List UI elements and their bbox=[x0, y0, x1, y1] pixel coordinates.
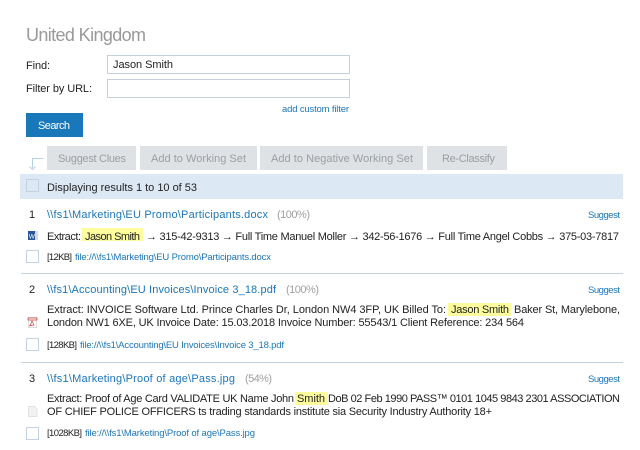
result 2 bbox=[26, 284, 620, 351]
button: add to working set bbox=[140, 146, 257, 170]
result 2 checkbox bbox=[26, 338, 38, 350]
selection arrow icon bbox=[30, 158, 44, 170]
result 1 highlight bbox=[82, 228, 143, 241]
results header bar: Displaying results 1 to 10 of 53 bbox=[47, 182, 197, 194]
result 3 extract bbox=[47, 393, 620, 418]
result 2 extract: Extract: INVOICE Software Ltd. Prince Charles Dr, London NW4 3FP, UK Billed To: bbox=[47, 304, 446, 316]
result 2 extract: Baker St, Marylebone, bbox=[514, 304, 620, 316]
search button bbox=[26, 113, 83, 137]
result 1: 1 bbox=[29, 209, 35, 221]
form: filter by URL field: Filter by URL: bbox=[26, 83, 92, 95]
title: United Kingdom bbox=[26, 25, 146, 45]
result 3: 3 bbox=[29, 373, 35, 385]
result 1 score: (100%) bbox=[277, 209, 310, 221]
result 1 bbox=[26, 209, 620, 263]
results header bar bbox=[20, 174, 623, 199]
icon: blank document bbox=[28, 406, 37, 416]
result 2 link: \\fs1\Accounting\EU Invoices\Invoice 3_18.pdf bbox=[47, 284, 277, 296]
icon: pdf document bbox=[28, 318, 37, 328]
result 1 suggest link: Suggest bbox=[588, 210, 620, 221]
result 3 bbox=[26, 373, 620, 440]
result 2: 2 bbox=[29, 284, 35, 296]
button: re-classify bbox=[427, 146, 507, 170]
button: suggest clues: Suggest Clues bbox=[58, 153, 126, 165]
result 3 checkbox bbox=[26, 428, 38, 440]
form: find field: Find: bbox=[26, 60, 50, 72]
result 3 highlight bbox=[295, 392, 328, 405]
result 1 link: \\fs1\Marketing\EU Promo\Participants.docx bbox=[47, 209, 268, 221]
result 2 score: (100%) bbox=[286, 284, 319, 296]
result 3 score: (54%) bbox=[245, 373, 272, 385]
result 3 extract: Extract: Proof of Age Card VALIDATE UK Name John bbox=[47, 393, 294, 405]
search button: Search bbox=[38, 120, 70, 132]
result 1 file info: [12KB] bbox=[47, 252, 72, 263]
result 1 extract: → 315-42-9313 → Full Time Manuel Moller → 342-56-1676 → Full Time Angel Cobbs → 375-03-7817 bbox=[146, 231, 619, 243]
result 3 file info: [1028KB] bbox=[47, 428, 82, 439]
button: add to negative working set bbox=[260, 146, 423, 170]
form: find field: Jason Smith bbox=[113, 59, 173, 71]
result 2 extract bbox=[47, 304, 620, 329]
result 3 extract: Smith bbox=[297, 393, 325, 405]
result 3 file info: file://\\fs1\Marketing\Proof of age\Pass.jpg bbox=[85, 428, 255, 439]
result 2 highlight bbox=[448, 303, 511, 316]
result 2 extract: Jason Smith bbox=[451, 304, 509, 316]
result 2 suggest link: Suggest bbox=[588, 285, 620, 296]
result 1 file info: file://\\fs1\Marketing\EU Promo\Participants.docx bbox=[75, 252, 271, 263]
result 2 file info: [128KB] bbox=[47, 340, 77, 351]
result 1 extract: Extract: bbox=[47, 231, 81, 243]
result 2 extract: London NW1 6XE, UK Invoice Date: 15.03.2018 Invoice Number: 55543/1 Client Reference: 234 564 bbox=[47, 317, 524, 329]
result 3 extract: OF CHIEF POLICE OFFICERS ts trading standards institute sia Security Industry Authority 18+ bbox=[47, 406, 492, 418]
icon: word document: W bbox=[29, 234, 36, 240]
result 1 extract: Jason Smith bbox=[85, 231, 140, 243]
form: filter by URL field bbox=[26, 80, 350, 98]
result 2 file info: file://\\fs1\Accounting\EU Invoices\Invoice 3_18.pdf bbox=[80, 340, 284, 351]
form: find field bbox=[26, 56, 350, 74]
result 1 checkbox bbox=[26, 250, 38, 262]
result 3 link: \\fs1\Marketing\Proof of age\Pass.jpg bbox=[47, 373, 235, 385]
icon: word document bbox=[28, 231, 38, 240]
button: suggest clues bbox=[47, 146, 136, 170]
result 3 suggest link: Suggest bbox=[588, 374, 620, 385]
button: add to negative working set: Add to Negative Working Set bbox=[271, 153, 413, 165]
button: add to working set: Add to Working Set bbox=[151, 153, 246, 165]
add custom filter link: add custom filter bbox=[282, 104, 349, 115]
button: re-classify: Re-Classify bbox=[442, 153, 496, 165]
result 3 extract: DoB 02 Feb 1990 PASS™ 0101 1045 9843 2301 ASSOCIATION bbox=[328, 393, 620, 405]
